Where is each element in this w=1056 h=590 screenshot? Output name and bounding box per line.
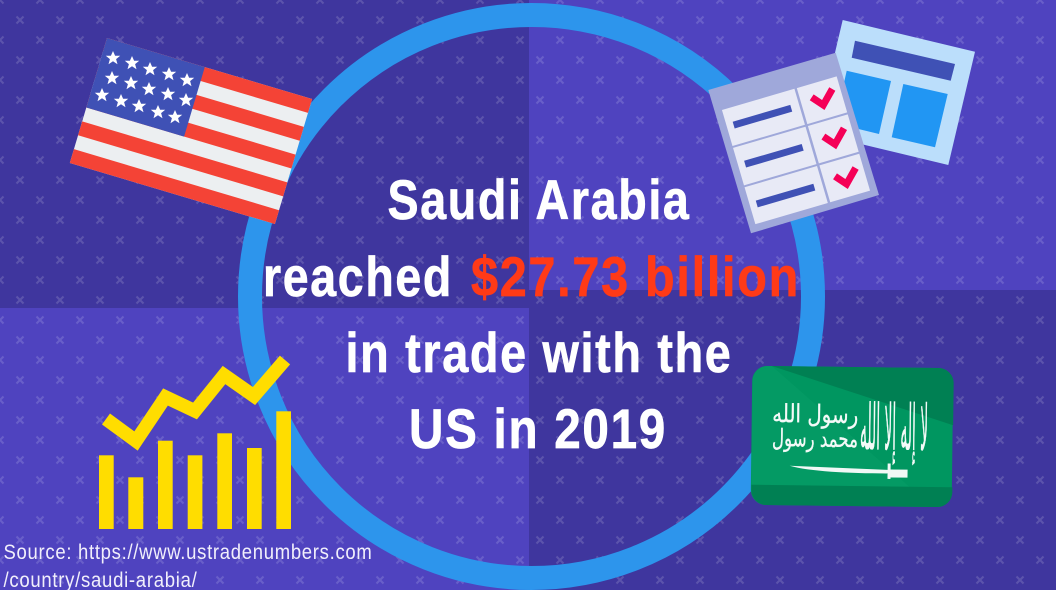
icon: layout sheet [816, 20, 975, 165]
flag inscription: رسول الله [772, 399, 858, 429]
icon: Saudi flag [751, 366, 954, 507]
icon: Saudi flag: لا إله إلا الله [860, 390, 929, 467]
icon: bar and line chart [99, 360, 291, 529]
source note: Source: https://www.ustradenumbers.com [4, 541, 372, 564]
flag inscription: محمد رسول [772, 424, 858, 453]
title: $27.73 billion [471, 245, 800, 308]
title: Saudi Arabia [388, 168, 690, 231]
title: reached [263, 245, 453, 308]
flag inscription [772, 389, 929, 467]
title [263, 168, 800, 460]
title: US in 2019 [409, 397, 667, 460]
icon: US flag [70, 38, 312, 224]
icon: checklist [708, 53, 879, 233]
source note [4, 541, 372, 590]
flag sword [789, 462, 908, 479]
title: in trade with the [346, 321, 732, 384]
blue ring [250, 15, 813, 578]
